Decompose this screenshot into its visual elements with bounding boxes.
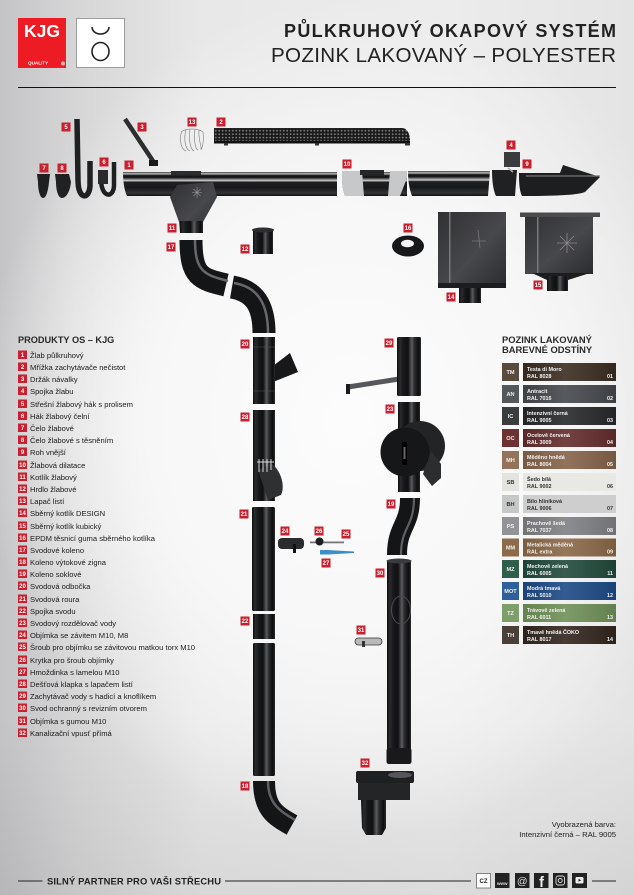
swatch MM: MM — [506, 546, 515, 552]
panel: colour shades — [502, 334, 616, 644]
item 26: Krytka pro šroub objímky — [30, 656, 114, 665]
swatch TZ — [502, 604, 616, 622]
tag 30 — [376, 568, 384, 578]
part 10: gutter expansion joint — [342, 170, 407, 196]
swatch MOT: 12 — [607, 593, 613, 599]
panel: product list — [18, 335, 195, 738]
icon: email — [515, 873, 530, 888]
logo: KJG Quality: QUALITY — [28, 60, 48, 66]
swatch TZ: TZ — [507, 611, 514, 617]
item 3: 3 — [21, 377, 25, 383]
swatch MZ: Mechově zelená — [527, 564, 569, 570]
title: POZINK LAKOVANÝ – POLYESTER — [271, 44, 616, 67]
tag 22: 22 — [242, 619, 249, 625]
swatch MOT: RAL 5010 — [527, 593, 551, 599]
swatch SB — [502, 473, 616, 491]
swatch TH: TH — [507, 633, 514, 639]
swatch MM — [502, 538, 616, 556]
swatch TM: TM — [506, 370, 515, 376]
item 2: Mřížka zachytávače nečistot — [30, 363, 126, 372]
tag 23: 23 — [387, 407, 394, 413]
tag 6 — [100, 158, 108, 166]
tag 11: 11 — [169, 226, 176, 232]
tag 26: 26 — [316, 529, 323, 535]
tag 13 — [188, 118, 196, 126]
item 17: 17 — [19, 548, 26, 554]
swatch TM: 01 — [607, 374, 613, 380]
item 30: 30 — [19, 706, 26, 712]
tag 24: 24 — [282, 529, 289, 535]
swatch AN: RAL 7016 — [527, 396, 551, 402]
tag 2: 2 — [219, 120, 223, 126]
item 32: Kanalizační vpusť přímá — [30, 729, 113, 738]
item 16: 16 — [19, 536, 26, 542]
tag 6: 6 — [102, 160, 106, 166]
item 28: 28 — [19, 682, 26, 688]
swatch MZ: MZ — [506, 567, 515, 573]
swatch MZ: RAL 6005 — [527, 571, 551, 577]
tag 2 — [216, 118, 226, 126]
item 12: Hrdlo žlabové — [30, 485, 76, 494]
tag 8: 8 — [60, 166, 64, 172]
tag 17 — [166, 242, 176, 252]
part 3: ladder bracket — [125, 119, 158, 166]
item 3: Držák návalky — [30, 375, 78, 384]
tag 23 — [386, 404, 394, 414]
item 10: Žlabová dilatace — [30, 461, 85, 470]
item 5: 5 — [21, 402, 25, 408]
item 15: 15 — [19, 524, 26, 530]
tag 21 — [240, 510, 248, 518]
title — [271, 19, 616, 67]
item 26: 26 — [19, 658, 26, 664]
item 7: Čelo žlabové — [30, 424, 74, 433]
tag 1: 1 — [127, 163, 131, 169]
icon: language CZ: CZ — [480, 879, 488, 885]
swatch MH — [502, 451, 616, 469]
swatch OC — [502, 429, 616, 447]
icon: www — [495, 873, 510, 888]
swatch TH: RAL 8017 — [527, 637, 551, 643]
part 4: gutter joint — [504, 152, 520, 172]
tag 30: 30 — [377, 571, 384, 577]
tag 3 — [138, 122, 146, 132]
part 29: water collector with hose — [346, 337, 421, 396]
swatch BH: RAL 9006 — [527, 506, 551, 512]
item 23: 23 — [19, 621, 26, 627]
part 20: downpipe branch — [253, 337, 298, 404]
part 2: debris mesh — [214, 128, 410, 146]
icon: email: @ — [517, 876, 528, 888]
part 26 and 25: screw with cap — [310, 538, 344, 546]
item 8: 8 — [21, 438, 25, 444]
part 18: outlet elbow — [264, 781, 295, 825]
tag 25 — [342, 530, 350, 538]
item 19: Koleno soklové — [30, 570, 82, 579]
item 25: Šroub pro objímku se závitovou matkou torx M10 — [30, 643, 195, 652]
tag 24 — [280, 526, 290, 536]
item 27: Hmoždinka s lamelou M10 — [30, 668, 119, 677]
tag 10 — [342, 160, 352, 168]
swatch TH: 14 — [607, 637, 613, 643]
tag 15: 15 — [535, 283, 542, 289]
gutter parts diagram — [37, 119, 600, 835]
colour heading — [502, 334, 593, 355]
note: displayed colour: Vyobrazená barva: — [552, 820, 616, 829]
tag 15 — [534, 280, 542, 290]
item 21: Svodová roura — [30, 595, 80, 604]
swatch MH: 05 — [607, 462, 613, 468]
tag 32 — [360, 758, 370, 768]
tag 14: 14 — [448, 295, 455, 301]
tag 11 — [168, 224, 176, 232]
part 9: outer corner — [519, 165, 600, 196]
icon: instagram — [553, 873, 568, 888]
item 2: 2 — [21, 365, 25, 371]
swatch PS: PS — [507, 524, 514, 530]
tag 12 — [240, 244, 250, 254]
item 1: 1 — [21, 353, 25, 359]
item 11: Kotlík žlabový — [30, 473, 77, 482]
item 13 — [18, 496, 65, 506]
swatch TZ: Trávově zelená — [527, 608, 566, 614]
item 29: 29 — [19, 694, 26, 700]
lower downpipe — [253, 643, 275, 776]
tag 29: 29 — [386, 341, 393, 347]
tag 17: 17 — [168, 245, 175, 251]
item 9: Roh vnější — [30, 448, 67, 457]
part 13: leaf catcher — [180, 129, 203, 151]
swatch BH: BH — [506, 502, 515, 508]
item 9: 9 — [21, 450, 25, 456]
item 13: 13 — [19, 499, 26, 505]
tag 26 — [314, 526, 324, 536]
note: displayed colour — [519, 820, 616, 839]
swatch IC: RAL 9005 — [527, 418, 551, 424]
part 31: rubber clamp — [355, 638, 382, 647]
tag 7: 7 — [42, 166, 46, 172]
logo: KJG Quality — [18, 18, 66, 68]
swatch BH: Bílo hliníková — [527, 499, 563, 505]
item 14: Sběrný kotlík DESIGN — [30, 509, 105, 518]
item 28: Dešťová klapka s lapačem listí — [30, 680, 134, 689]
part 7: end cap — [37, 174, 50, 198]
item 22: Spojka svodu — [30, 607, 76, 616]
icon: www: www — [496, 881, 508, 886]
icon: language CZ — [476, 874, 490, 888]
swatch MOT: MOT — [504, 589, 517, 595]
tag 4 — [506, 140, 516, 150]
item 20: 20 — [19, 584, 26, 590]
part 24: clamp — [278, 538, 304, 553]
item 24: Objímka se závitem M10, M8 — [30, 631, 128, 640]
item 20: Svodová odbočka — [30, 582, 91, 591]
item 24: 24 — [19, 633, 26, 639]
item 21: 21 — [19, 597, 26, 603]
tag 22 — [240, 616, 250, 626]
item 11: 11 — [19, 475, 26, 481]
tag 9 — [522, 160, 532, 168]
item 22: 22 — [19, 609, 26, 615]
swatch PS: RAL 7037 — [527, 528, 551, 534]
swatch MOT: Modrá tmavá — [527, 586, 561, 592]
tag 7 — [40, 164, 48, 172]
tag 5: 5 — [64, 125, 68, 131]
swatch AN: Antracit — [527, 389, 548, 395]
item 32: 32 — [19, 731, 26, 737]
item 16: EPDM těsnicí guma sběrného kotlíka — [30, 534, 156, 543]
swatch MH: Měděno hnědá — [527, 455, 566, 461]
tag 3: 3 — [140, 125, 144, 131]
tag 28: 28 — [242, 415, 249, 421]
swatch TH: Tmavě hnědá ČOKO — [527, 629, 579, 636]
swatch IC: Intenzivní černá — [527, 411, 569, 417]
swatch PS: 08 — [607, 528, 613, 534]
item 12: 12 — [19, 487, 26, 493]
colour heading: POZINK LAKOVANÝ — [502, 334, 593, 345]
icon: semicircular gutter profile — [76, 18, 124, 68]
footer slogan: SILNÝ PARTNER PRO VAŠI STŘECHU — [47, 876, 221, 886]
part number tags — [40, 118, 542, 790]
tag 31 — [356, 626, 366, 634]
item 17: Svodové koleno — [30, 546, 84, 555]
part 1: semicircular gutter — [123, 171, 337, 196]
swatch OC: RAL 3009 — [527, 440, 551, 446]
swatch TZ: 13 — [607, 615, 613, 621]
tag 10: 10 — [344, 162, 351, 168]
part 32: drain inlet — [356, 771, 414, 835]
swatch MM: 09 — [607, 550, 613, 556]
part 16: EPDM seal ring — [392, 236, 424, 256]
tag 16 — [404, 224, 412, 232]
item 25: 25 — [19, 645, 26, 651]
tag 14 — [446, 292, 456, 302]
item 4: 4 — [21, 389, 25, 395]
swatch IC: 03 — [607, 418, 613, 424]
swatch AN — [502, 385, 616, 403]
swatch MH: RAL 8004 — [527, 462, 551, 468]
swatch SB: SB — [507, 480, 514, 486]
item 19: 19 — [19, 572, 26, 578]
part 6: front gutter hook — [98, 162, 114, 195]
part 14: collector box DESIGN — [438, 212, 506, 303]
part 5: roof gutter hook — [77, 119, 90, 196]
tag 13: 13 — [189, 120, 196, 126]
swatch TM — [502, 363, 616, 381]
swatch IC: IC — [508, 414, 513, 420]
swatch AN: AN — [506, 392, 515, 398]
swatch MOT — [502, 582, 616, 600]
part 22: downpipe coupler — [253, 614, 275, 639]
swatch IC — [502, 407, 616, 425]
swatch BH — [502, 495, 616, 513]
swatch SB: RAL 9002 — [527, 484, 551, 490]
tag 5 — [62, 122, 70, 132]
item 6: Hák žlabový čelní — [30, 412, 90, 421]
tag 27 — [322, 558, 330, 568]
colour heading: BAREVNÉ ODSTÍNY — [502, 344, 593, 355]
tag 20: 20 — [242, 342, 249, 348]
tag 19: 19 — [388, 502, 395, 508]
item 4: Spojka žlabu — [30, 387, 73, 396]
swatch PS: Prachově šedá — [527, 521, 566, 527]
icon: youtube — [572, 873, 587, 888]
tag 18: 18 — [242, 784, 249, 790]
second downpipe elbow — [232, 283, 268, 333]
icon: facebook — [534, 873, 548, 891]
tag 4: 4 — [509, 143, 513, 149]
part 27: wall plug — [320, 550, 354, 554]
part 23: water distributor — [380, 402, 445, 492]
title: PŮLKRUHOVÝ OKAPOVÝ SYSTÉM — [284, 19, 616, 41]
swatch MH: MH — [506, 458, 515, 464]
item 10: 10 — [19, 463, 26, 469]
part 30: downpipe with inspection opening — [386, 558, 412, 764]
tag 20 — [240, 340, 250, 348]
part 28: rain flap with leaf catcher — [253, 410, 283, 501]
product list heading: PRODUKTY OS – KJG — [18, 335, 114, 345]
item 23: Svodový rozdělovač vody — [30, 619, 116, 628]
item 7: 7 — [21, 426, 25, 432]
item 31: 31 — [19, 719, 26, 725]
tag 31: 31 — [358, 628, 365, 634]
corner piece — [492, 170, 517, 196]
swatch MM: Metalická měděná — [527, 542, 574, 548]
tag 25: 25 — [343, 532, 350, 538]
tag 8 — [58, 164, 66, 172]
swatch BH: 07 — [607, 506, 613, 512]
swatch MZ: 11 — [607, 571, 613, 577]
logo: KJG Quality: KJG — [24, 21, 60, 41]
tag 16: 16 — [405, 226, 412, 232]
swatch AN: 02 — [607, 396, 613, 402]
tag 1 — [124, 160, 134, 170]
icon: facebook: f — [539, 875, 544, 891]
part 8: end cap with seal — [55, 174, 71, 198]
part 21: downpipe — [252, 507, 275, 611]
swatch MZ — [502, 560, 616, 578]
swatch TM: RAL 8028 — [527, 374, 551, 380]
footer — [18, 873, 616, 891]
tag 28 — [240, 412, 250, 422]
swatch TM: Testa di Moro — [527, 367, 562, 373]
item 1: Žlab půlkruhový — [30, 351, 84, 360]
swatch OC: 04 — [607, 440, 613, 446]
swatch TZ: RAL 6011 — [527, 615, 551, 621]
tag 32: 32 — [362, 761, 369, 767]
item 9 — [18, 448, 67, 457]
part 19: plinth elbow — [397, 498, 414, 555]
tag 9: 9 — [525, 162, 529, 168]
tag 21: 21 — [241, 512, 248, 518]
item 15: Sběrný kotlík kubický — [30, 522, 102, 531]
swatch SB: 06 — [607, 484, 613, 490]
tag 18 — [240, 782, 250, 790]
tag 27: 27 — [323, 561, 330, 567]
item 6: 6 — [21, 414, 25, 420]
tag 12: 12 — [242, 247, 249, 253]
swatch TH — [502, 626, 616, 644]
item 14: 14 — [19, 511, 26, 517]
item 31: Objímka s gumou M10 — [30, 717, 106, 726]
gutter section — [408, 171, 490, 196]
swatch PS — [502, 517, 616, 535]
part 17: downpipe elbow — [191, 240, 228, 285]
part 12: gutter neck — [252, 228, 274, 254]
item 30: Svod ochranný s revizním otvorem — [30, 704, 147, 713]
swatch OC: Ocelově červená — [527, 433, 571, 439]
part 15: cubic collector box — [520, 212, 600, 291]
item 5: Střešní žlabový hák s prolisem — [30, 400, 133, 409]
note: displayed colour: Intenzivní černá – RAL 9005 — [519, 830, 616, 839]
item 18: 18 — [19, 560, 26, 566]
swatch OC: OC — [506, 436, 515, 442]
tag 29 — [384, 338, 394, 348]
swatch MM: RAL extra — [527, 550, 553, 556]
item 13: Lapač listí — [30, 497, 65, 506]
item 27: 27 — [19, 670, 26, 676]
tag 19 — [386, 500, 396, 508]
item 29: Zachytávač vody s hadicí a knoflíkem — [30, 692, 156, 701]
swatch SB: Šedo bílá — [527, 475, 552, 483]
part 11: gutter outlet — [170, 182, 217, 233]
item 18: Koleno výtokové zigna — [30, 558, 107, 567]
item 8: Čelo žlabové s těsněním — [30, 436, 113, 445]
